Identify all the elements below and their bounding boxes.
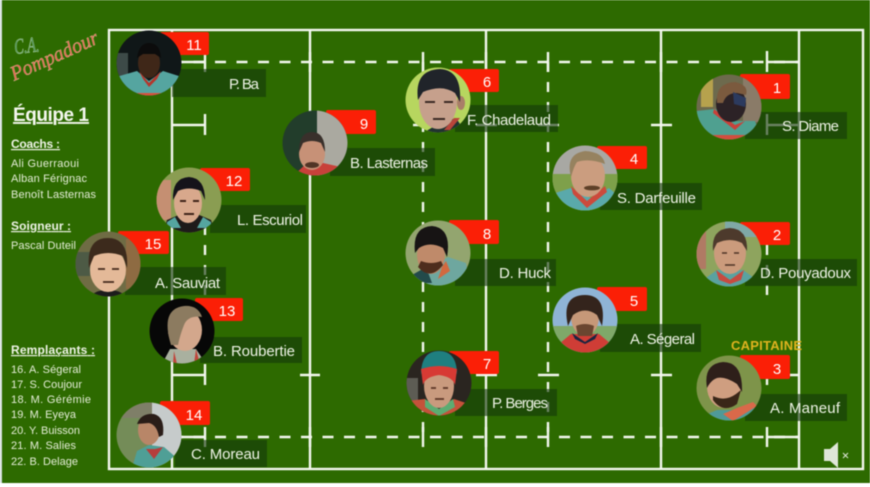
physio: Soigneur : — [11, 219, 71, 233]
coaches: Coachs : — [11, 137, 60, 151]
player 3 — [696, 355, 847, 421]
player 6: F. Chadelaud — [467, 112, 551, 129]
player 3: 3 — [773, 361, 781, 378]
player 5 — [552, 287, 701, 353]
physio — [11, 219, 76, 252]
player 13 — [149, 298, 302, 364]
logo: C.A. Pompadour: Pompadour — [5, 25, 103, 86]
player 1: 1 — [773, 80, 781, 97]
player 5: 5 — [630, 293, 638, 310]
player 7: P. Berges — [492, 395, 548, 412]
player 2: 2 — [773, 227, 781, 244]
player 12: L. Escuriol — [237, 212, 303, 229]
player 13: B. Roubertie — [213, 343, 295, 360]
coaches: Alban Férignac — [11, 173, 88, 185]
player 6: 6 — [483, 74, 491, 91]
player 12: 12 — [226, 173, 242, 190]
rugby field lines — [109, 30, 863, 469]
player 11 — [116, 30, 266, 97]
player 4: S. Darfeuille — [617, 190, 696, 207]
player 11: 11 — [186, 37, 202, 54]
coaches: Ali Guerraoui — [11, 158, 79, 170]
player 15: 15 — [145, 236, 161, 253]
player 12 — [156, 167, 306, 233]
substitutes: 22. B. Delage — [11, 456, 78, 468]
player 15 — [75, 231, 226, 297]
player 14: C. Moreau — [191, 446, 260, 463]
coaches — [11, 137, 96, 201]
player 6 — [405, 67, 558, 133]
substitutes — [11, 343, 95, 468]
substitutes: 21. M. Salies — [11, 440, 76, 452]
player 4 — [552, 145, 702, 211]
coaches: Benoît Lasternas — [11, 189, 96, 201]
player 1: S. Diame — [782, 118, 839, 135]
substitutes: 20. Y. Buisson — [11, 425, 80, 437]
player 5: A. Ségeral — [630, 331, 695, 348]
team title: Équipe 1 — [13, 104, 89, 126]
player 7: 7 — [483, 356, 491, 373]
substitutes: 17. S. Coujour — [11, 379, 82, 391]
player 9: 9 — [360, 116, 368, 133]
player 14: 14 — [186, 407, 202, 424]
logo: C.A. Pompadour: C.A. — [13, 31, 40, 59]
player 8: 8 — [483, 226, 491, 243]
icon: muted speaker — [824, 442, 848, 468]
player 1 — [696, 74, 847, 140]
captain label: CAPITAINE — [731, 338, 802, 353]
player 9: B. Lasternas — [350, 155, 428, 172]
substitutes: 18. M. Gérémie — [11, 394, 91, 406]
player 8 — [405, 220, 556, 286]
player 3: A. Maneuf — [770, 400, 841, 417]
player 15: A. Sauviat — [155, 275, 221, 292]
player 2: D. Pouyadoux — [760, 265, 852, 282]
player 8: D. Huck — [499, 265, 552, 282]
substitutes: Remplaçants : — [11, 343, 95, 357]
substitutes: 16. A. Ségeral — [11, 364, 81, 376]
player 4: 4 — [630, 151, 638, 168]
player 2 — [696, 221, 857, 287]
player 13: 13 — [219, 303, 235, 320]
player 11: P. Ba — [229, 76, 260, 93]
substitutes: 19. M. Eyeya — [11, 409, 77, 421]
player 14 — [116, 401, 267, 468]
physio: Pascal Duteil — [11, 240, 76, 252]
player 9 — [282, 110, 435, 176]
player 7 — [406, 350, 557, 416]
